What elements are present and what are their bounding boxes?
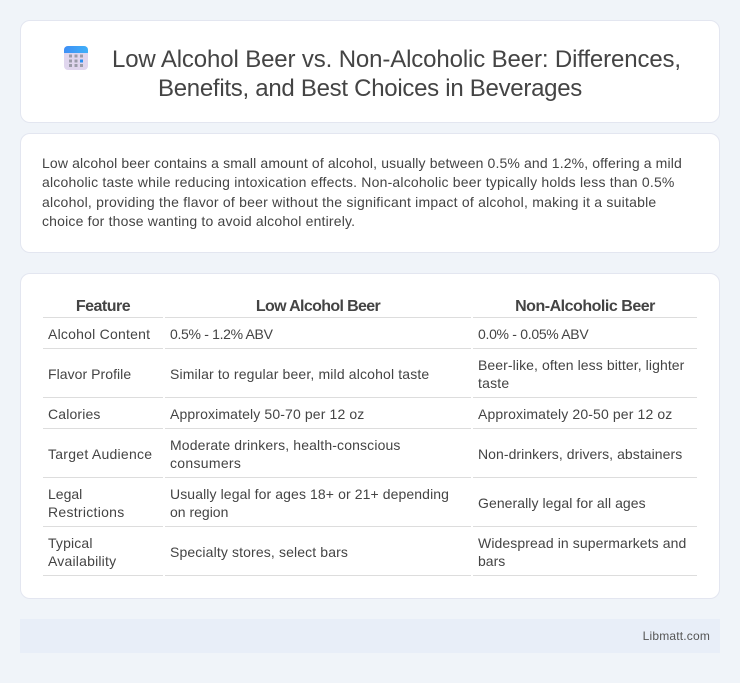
heading: Non-Alcoholic Beer: Non-Alcoholic Beer: [515, 298, 655, 315]
row: Legal Restrictions: Legal: [48, 486, 82, 502]
row: Alcohol Content: Alcohol Content: [48, 326, 150, 342]
row: Flavor Profile: Similar to regular beer, mild alcohol taste: [170, 366, 429, 382]
row: Calories: Calories: [48, 406, 101, 422]
text block: introduction: Low alcohol beer contains a small amount of alcohol, usually between 0.5% and 1.2%, offering a mild: [42, 155, 682, 171]
text block: introduction: alcoholic taste while reducing intoxication effects. Non-alcoholic beer typically holds less than 0.5%: [42, 174, 675, 190]
row: Target Audience: Target Audience: [48, 446, 152, 462]
row: Typical Availability: Specialty stores, select bars: [170, 544, 348, 560]
row: Target Audience: Non-drinkers, drivers, abstainers: [478, 446, 682, 462]
row: Typical Availability: Typical: [48, 535, 93, 551]
row: Typical Availability: bars: [478, 553, 505, 569]
row: Target Audience: Moderate drinkers, health-conscious: [170, 437, 401, 453]
footer bar: [20, 619, 720, 653]
row: Target Audience: consumers: [170, 455, 241, 471]
heading: Feature: Feature: [76, 298, 130, 315]
row: Legal Restrictions: Usually legal for ages 18+ or 21+ depending: [170, 486, 449, 502]
row: Legal Restrictions: on region: [170, 504, 228, 520]
text block: introduction: alcohol, providing the flavor of beer without the significant impact of alcohol, making it a suitable: [42, 194, 656, 210]
text block: introduction: [42, 155, 682, 229]
title: Low Alcohol Beer vs. Non-Alcoholic Beer: Differences,: [112, 46, 681, 73]
row: Calories: Approximately 50-70 per 12 oz: [170, 406, 364, 422]
row: Alcohol Content: 0.0% - 0.05% ABV: [478, 326, 588, 342]
row: Alcohol Content: 0.5% - 1.2% ABV: [170, 326, 273, 342]
row: Flavor Profile: taste: [478, 375, 509, 391]
title: [112, 46, 681, 102]
row: Legal Restrictions: [48, 486, 646, 520]
row: Flavor Profile: [48, 357, 684, 391]
footer text: Libmatt.com: [643, 629, 710, 643]
row: Target Audience: [48, 437, 682, 471]
row: Legal Restrictions: Generally legal for all ages: [478, 495, 646, 511]
text block: introduction: choice for those wanting to avoid alcohol entirely.: [42, 213, 355, 229]
row: Typical Availability: [48, 535, 686, 569]
panel: title card: [20, 20, 720, 123]
row: Typical Availability: Availability: [48, 553, 116, 569]
row: Typical Availability: Widespread in supermarkets and: [478, 535, 686, 551]
panel: introduction: [20, 133, 720, 253]
row: Calories: Approximately 20-50 per 12 oz: [478, 406, 672, 422]
panel: comparison table card: [20, 273, 720, 599]
row: Flavor Profile: Beer-like, often less bitter, lighter: [478, 357, 684, 373]
row: Legal Restrictions: Restrictions: [48, 504, 124, 520]
heading: Low Alcohol Beer: Low Alcohol Beer: [256, 298, 380, 315]
comparison table: [43, 298, 697, 576]
icon: calendar: [64, 46, 88, 70]
title: Benefits, and Best Choices in Beverages: [158, 75, 582, 102]
row: Alcohol Content: [48, 326, 589, 342]
row: Calories: [48, 406, 672, 422]
row: Flavor Profile: Flavor Profile: [48, 366, 131, 382]
